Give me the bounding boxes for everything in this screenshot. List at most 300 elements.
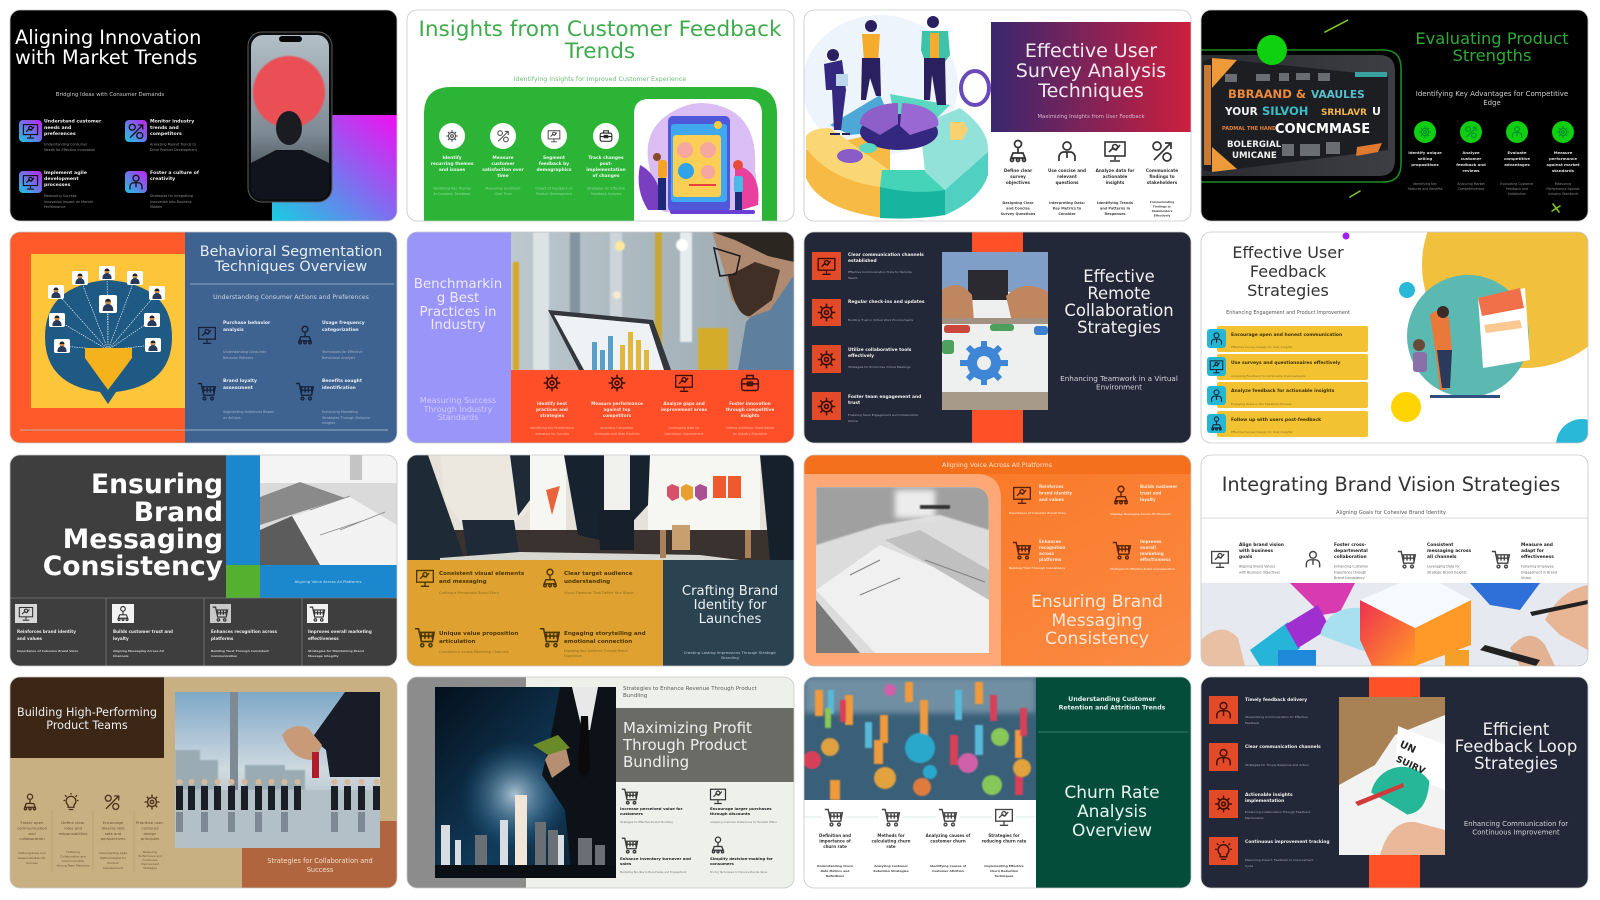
item: selling propositions: Identify unique — [1408, 150, 1442, 155]
item: trust and loyalty: loyalty — [1140, 497, 1156, 502]
photo backing panel — [804, 474, 1001, 666]
green panel — [424, 87, 777, 221]
item: messaging: Strategic Brand Insights — [1427, 570, 1467, 574]
item: questions: Interpreting Data: — [1049, 201, 1086, 205]
item: collaborative tools: Utilize collaborative tools — [848, 347, 912, 353]
green circle — [1257, 35, 1287, 65]
title: Strategies — [1077, 318, 1161, 337]
title: Messaging — [63, 524, 223, 555]
item: culture of creativity: creativity — [150, 176, 175, 182]
top tagline: Bundling — [623, 693, 647, 699]
image: typographic board: UMICANE — [1232, 151, 1277, 161]
item: communicate: Communicating — [1150, 200, 1174, 204]
item: perceived value: Strategies for Effective Product Bundling — [620, 820, 673, 824]
item: advantages: advantages — [1504, 162, 1530, 167]
item: agile processes: Performance — [44, 205, 66, 209]
item: follow up — [1207, 411, 1368, 437]
item: messaging — [1398, 542, 1472, 574]
item: storytelling: Experience — [564, 654, 582, 658]
item: engagement: Foster team engagement and — [848, 394, 921, 400]
item: satisfaction: Measuring Sentiment — [485, 186, 521, 190]
title: Feedback Loop — [1455, 737, 1577, 756]
title: Feedback — [1250, 262, 1327, 281]
item: marketing effectiveness: overall — [1140, 545, 1156, 550]
image: phone with silhouette — [248, 32, 332, 202]
item: culture of creativity: Innovation into Business — [150, 200, 192, 204]
item: customer needs: needs and — [44, 125, 71, 131]
item: methods: Analyzing Customer — [874, 864, 908, 868]
item: decision-making — [710, 837, 773, 874]
item: reinforces identity: and values — [17, 636, 43, 641]
panel: Building High-Performing Product Teams — [10, 677, 397, 888]
item: clear channels — [1209, 743, 1321, 771]
image: audience funnel — [31, 254, 185, 408]
item: collaboration: departmental — [1334, 548, 1368, 554]
item: foster innovation: Foster innovation — [729, 401, 771, 406]
item: recognition: platforms — [211, 636, 234, 641]
item: measure: Measure and — [1521, 542, 1553, 548]
subtitle: Measuring Success — [420, 396, 496, 405]
column dividers — [52, 810, 134, 872]
item: diverse skills: Methodologies for — [100, 856, 127, 860]
image: survey illustration — [1407, 275, 1530, 398]
title: Strategies — [1474, 754, 1558, 773]
item: engagement: Fostering Team Engagement and Collaboration — [848, 413, 919, 417]
item: analyze gaps: Continuous Improvement — [664, 432, 704, 436]
item: target audience: understanding — [564, 579, 610, 585]
item: messaging: all channels — [1427, 554, 1457, 560]
item: communication channels: established — [848, 258, 877, 264]
image: typographic board: PADMAL THE HAND — [1222, 126, 1276, 132]
item: causes — [926, 806, 971, 873]
orange vertical band — [972, 232, 1023, 443]
item: measure — [1492, 542, 1557, 580]
item: best practices: strategies — [540, 413, 564, 418]
orange vertical band — [1369, 677, 1420, 888]
item: selling propositions: Features and Benefits — [1408, 187, 1443, 191]
subtitle: Understanding Consumer Actions and Preferences — [213, 294, 369, 301]
item: larger purchases — [710, 789, 777, 824]
item: advantages — [1500, 121, 1534, 196]
item: post implementation — [586, 123, 626, 196]
item: diverse skills: perspectives — [101, 836, 125, 841]
item: open communication — [17, 794, 48, 865]
item: agile processes: Measuring Success: — [44, 194, 78, 198]
item: objectives: objectives — [1006, 180, 1031, 185]
item: reduction strategies: Churn Reduction — [990, 869, 1018, 873]
item: open communication: Responsibilities for — [18, 856, 46, 860]
subtitle: Bridging Ideas with Consumer Demands — [56, 92, 164, 98]
subtitle: Identifying Insights for Improved Customer Experience — [514, 76, 686, 83]
item: questions: questions — [1055, 180, 1079, 185]
item: objectives: survey — [1010, 174, 1026, 179]
item: trust and loyalty: Builds customer — [1140, 484, 1177, 489]
item: agile processes: Innovation Impact on Market — [44, 200, 93, 204]
item: user-centered design: design — [144, 831, 157, 836]
item: value proposition — [415, 629, 518, 654]
item: user-centered design: Continuous — [142, 858, 158, 862]
title: Messaging — [1051, 611, 1143, 631]
item: communication channels: Effective Communication Tools for Remote — [848, 270, 912, 274]
item: vision alignment: Aligning Brand Values — [1239, 564, 1275, 568]
panel: Ensuring Brand Messaging Consistency (orange) — [804, 455, 1191, 666]
item: engagement: trust — [848, 400, 860, 406]
item: reinforces identity — [15, 604, 78, 653]
title: Effective — [1083, 267, 1155, 286]
subtitle: Environment — [1096, 382, 1142, 392]
title block — [10, 677, 164, 758]
item: continuous tracking: Measuring Impact: Feedback to Improvement — [1245, 858, 1314, 862]
item: culture of creativity: Models — [150, 205, 162, 209]
title: Aligning Innovation — [15, 26, 201, 49]
item: clear channels: Clear communication channels — [1245, 744, 1321, 750]
item: benefits sought: Insights — [322, 421, 335, 425]
item: objectives: Define clear — [1004, 168, 1033, 173]
item: perceived value — [620, 789, 683, 824]
item: recognition: platforms — [1039, 557, 1062, 562]
item: brand loyalty: assessment — [223, 385, 254, 391]
item: user-centered design: Improvement — [141, 862, 159, 866]
item: definition: importance of — [819, 838, 851, 844]
item: methods: rate — [886, 844, 896, 849]
item: definition — [817, 806, 853, 878]
top tagline: Aligning Voice Across All Platforms — [942, 461, 1053, 469]
item: open communication: Defining Roles and — [18, 851, 46, 855]
item: best practices: Identifying Key Performance — [530, 426, 574, 430]
item: post implementation: post- — [600, 161, 613, 167]
image: survey clipboard: UN — [1398, 739, 1417, 756]
item: measure performance: Analyzing Competitor — [600, 426, 634, 430]
item: collaborative tools: effectively — [848, 353, 874, 359]
item: satisfaction: Over Time — [494, 192, 512, 196]
item: performance: Measuring — [1555, 182, 1571, 186]
item: benefits sought: Benefits sought — [322, 378, 363, 384]
item: actionable insights: Engaging Users in the Feedback Process — [1231, 402, 1292, 406]
item: communicate: Communicate — [1146, 168, 1178, 173]
rust callout — [242, 821, 397, 888]
item: performance — [1546, 121, 1580, 196]
item: customer trust: Builds customer trust and — [113, 629, 173, 634]
item: customer trust — [112, 604, 173, 658]
title: Overview — [1072, 821, 1152, 841]
item: best practices: practices and — [536, 407, 568, 412]
title: Industry — [430, 318, 486, 333]
item: value proposition: Unique value proposition — [439, 631, 518, 637]
item: reviews: reviews — [1463, 168, 1480, 173]
item: recognition — [210, 604, 278, 658]
image: typographic board: BOLERGIAL — [1227, 140, 1282, 150]
item: foster innovation — [726, 376, 774, 436]
item: open communication: Effective Survey Design for User Insights — [1231, 345, 1293, 349]
item: demographics: Segment — [543, 155, 565, 161]
subtitle: Enhancing Teamwork in a Virtual — [1060, 374, 1178, 383]
item: analyze: and Patterns in — [1100, 206, 1131, 210]
item: usage frequency: Techniques for Effective — [321, 350, 362, 354]
item: engagement: Online — [848, 419, 858, 423]
item: analyze gaps — [661, 376, 708, 436]
item: reduction strategies: reducing churn rate — [982, 838, 1027, 844]
item: reviews — [1456, 121, 1486, 191]
item: recognition: Building Trust Through Consistency — [1009, 566, 1065, 570]
title block — [616, 708, 794, 782]
item: best practices — [530, 375, 574, 436]
item: methods: Methods for — [877, 833, 905, 838]
item: measure performance: Measure performance — [591, 401, 643, 406]
item: perceived value: customers — [620, 811, 644, 816]
item: marketing effectiveness: Strategies for Maintaining Brand — [308, 649, 364, 653]
item: agile processes — [19, 170, 93, 209]
item: messaging: messaging across — [1427, 548, 1472, 554]
item: collaboration: Enhancing Customer — [1334, 564, 1369, 568]
image: phone illustration — [634, 99, 762, 221]
item: causes: Analyzing causes of — [926, 833, 971, 838]
item: usage frequency — [299, 320, 365, 360]
title: Consistency — [43, 551, 223, 582]
item: recurring themes: Identifying Key Themes — [433, 186, 472, 190]
item: foster innovation: on Industry Standards — [733, 432, 768, 436]
item: advantages: Evaluate — [1507, 150, 1527, 155]
item: collaboration: Brand Consistency — [1334, 576, 1365, 580]
item: actionable insights: implementation — [1245, 798, 1284, 804]
item: analyze gaps: improvement areas — [661, 407, 708, 412]
item: communicate: Findings to — [1153, 204, 1171, 208]
item: timely delivery: Streamlining Communication for Effective — [1245, 715, 1308, 719]
item: objectives: Survey Questions — [1001, 212, 1035, 216]
image: typographic board: BBRAAND & — [1228, 87, 1306, 101]
item: advantages: Feedback and — [1506, 187, 1528, 191]
item: reinforces identity: Importance of Cohesive Brand Voice — [17, 649, 78, 653]
image: grayscale wireframes — [260, 455, 397, 565]
item: diverse skills: Implementing Agile — [99, 851, 127, 855]
title: with Market Trends — [15, 46, 197, 69]
item: diverse skills: Encourage — [103, 820, 124, 825]
item: actionable insights: Enhancing Collaboration Through Feedback — [1245, 810, 1311, 814]
item: continuous tracking: Cycle — [1245, 864, 1253, 868]
title: Churn Rate — [1064, 783, 1160, 803]
item: visual elements: Crafting a Memorable Brand Story — [439, 591, 499, 595]
subtitle: Continuous Improvement — [1472, 828, 1560, 836]
panel: Insights from Customer Feedback Trends — [420, 20, 782, 221]
item: collaboration — [1306, 542, 1369, 580]
item: target audience: Clear target audience — [564, 571, 633, 577]
item: reviews: Analyze — [1462, 150, 1480, 155]
item: inventory: Enhance inventory turnover and — [620, 856, 691, 861]
item: usage frequency: Behavioral Analysis — [322, 356, 355, 360]
item: customer trust: loyalty — [113, 636, 129, 641]
item: methods — [871, 806, 911, 873]
item: objectives: Designing Clear — [1002, 201, 1034, 205]
item: satisfaction: customer — [491, 161, 515, 167]
item: roles: Fostering — [66, 850, 80, 854]
item: reviews: customer — [1461, 156, 1481, 161]
subtitle: Through Industry — [423, 405, 493, 414]
item: recognition: Enhances recognition across — [211, 629, 278, 634]
item: brand identity: brand identity — [1039, 490, 1072, 496]
item: open communication: Success — [26, 861, 38, 865]
top heading: Retention and Attrition Trends — [1059, 704, 1166, 712]
item: marketing effectiveness: Message Integrity — [308, 654, 339, 658]
item: demographics: Impact of Feedback on — [535, 186, 573, 190]
item: marketing effectiveness: Improves overall marketing — [308, 629, 372, 634]
item: agile processes: Implement agile — [44, 170, 87, 176]
item: timely delivery: Feedback — [1245, 721, 1260, 725]
item: communication channels: Clear communication channels — [848, 252, 924, 258]
item: recognition: Enhances — [1039, 539, 1062, 544]
title: Brand — [134, 497, 223, 528]
item: communicate: stakeholders — [1147, 180, 1178, 185]
item: recurring themes: recurring themes — [431, 161, 474, 167]
item: trust and loyalty: trust and — [1140, 490, 1161, 496]
item: open communication — [1207, 326, 1368, 352]
item: reviews: Competitiveness — [1458, 187, 1485, 191]
item: storytelling: Engaging storytelling and — [564, 631, 646, 637]
item: culture of creativity: Foster a culture of — [150, 170, 200, 176]
item: collaboration: Experience through — [1334, 570, 1366, 574]
orange footer band — [511, 370, 794, 443]
item: selling propositions — [1408, 121, 1443, 191]
item: marketing effectiveness — [1110, 539, 1175, 571]
item: communication channels: Teams — [847, 276, 858, 280]
rust callout: Success — [307, 866, 334, 874]
item: recurring themes: and issues — [439, 167, 465, 173]
item: foster innovation: Setting Ambitious Goals Based — [726, 426, 774, 430]
image: typographic board: SRHLAVR — [1321, 108, 1367, 118]
item: measure: Vision — [1521, 576, 1531, 580]
item: actionable insights — [1207, 382, 1368, 408]
item: agile processes: processes — [44, 182, 71, 188]
item: storytelling: emotional connection — [564, 639, 632, 645]
item: roles: Communication — [62, 859, 85, 863]
item: purchase behavior: analysis — [223, 327, 244, 333]
item: value proposition: articulation — [439, 639, 476, 645]
image: brand cards and hands — [1201, 583, 1588, 666]
image: typographic board: VAAULES — [1311, 89, 1365, 101]
item: timely delivery: Timely feedback delivery — [1245, 697, 1307, 703]
item: clear channels: Strategies for Timely Response and Action — [1245, 763, 1309, 767]
item: storytelling — [540, 629, 646, 658]
item: brand loyalty: on Actions — [223, 416, 241, 420]
item: target audience: Visual Elements That Define Your Brand — [564, 591, 634, 595]
item: visual elements — [417, 570, 525, 595]
item: definition: Definition and — [819, 833, 851, 838]
item: surveys: Analyzing Feedback for Actionable Improvements — [1231, 374, 1306, 378]
item: brand identity: Reinforces — [1039, 484, 1064, 489]
item: post implementation: of changes — [592, 173, 620, 179]
title: Consistency — [1045, 629, 1149, 649]
item: measure: effectiveness — [1521, 554, 1554, 560]
item: brand loyalty — [198, 378, 274, 420]
item: check-ins: Regular check-ins and updates — [848, 299, 925, 305]
item: decision-making: Simplify decision-making for — [710, 856, 773, 861]
item: communication channels — [812, 252, 924, 280]
item: continuous tracking — [1209, 837, 1330, 868]
subtitle: Aligning Goals for Cohesive Brand Identity — [1336, 510, 1446, 516]
item: recognition — [1009, 539, 1065, 570]
title: Behavioral Segmentation — [200, 244, 382, 260]
item: reduction strategies — [982, 806, 1027, 878]
title block: Building High-Performing — [17, 706, 157, 719]
item: industry trends — [125, 118, 198, 152]
connector line — [804, 816, 1036, 818]
item: roles: Define clear — [61, 820, 85, 825]
item: satisfaction: Measure — [492, 155, 514, 161]
item: demographics: demographics — [537, 167, 572, 173]
image: typographic board: CONCMMASE — [1275, 122, 1370, 137]
item: recognition: Building Trust Through Consistent — [211, 649, 269, 653]
item: analyze: Responses — [1104, 212, 1126, 216]
strip dividers — [10, 598, 397, 666]
item: questions: Use concise and — [1048, 168, 1086, 173]
image: team at whiteboards — [407, 455, 794, 560]
item: selling propositions: selling — [1418, 156, 1432, 161]
item: customer needs — [19, 118, 102, 152]
item: value proposition: Consistency Across Marketing Channels — [439, 650, 509, 654]
title: Insights from Customer Feedback — [419, 17, 782, 42]
item: post implementation: Strategies for Effective — [587, 186, 625, 190]
colour blocks — [226, 455, 397, 598]
item: demographics — [535, 123, 573, 196]
item: analyze — [1096, 142, 1135, 216]
item: analyze gaps: Analyze gaps and — [663, 401, 705, 406]
item: customer needs: Understand customer — [44, 118, 102, 124]
title: g Best — [437, 291, 479, 306]
item: customer needs: Needs for Effective Innovation — [44, 148, 95, 152]
subtitle: Standards — [438, 413, 478, 422]
image: survey clipboard — [1339, 697, 1445, 855]
item: advantages: Satisfaction — [1508, 192, 1526, 196]
top tagline: Strategies to Enhance Revenue Through Product — [623, 686, 758, 692]
title: Integrating Brand Vision Strategies — [1222, 473, 1560, 496]
item: collaboration: Foster cross- — [1334, 542, 1366, 548]
item: diverse skills: diverse skill — [101, 826, 125, 830]
item: questions: relevant — [1057, 174, 1077, 179]
item: surveys: Use surveys and questionnaires effectively — [1231, 360, 1340, 366]
item: open communication: Encourage open and honest communication — [1231, 332, 1342, 338]
item: reinforces identity: Reinforces brand identity — [17, 629, 76, 634]
subtitle: Enhancing Communication for — [1464, 820, 1568, 828]
item: definition: Understanding Churn — [817, 864, 853, 868]
subtitle: Creating Lasting Impressions Through Strategic — [684, 650, 776, 655]
item: industry trends: trends and — [150, 125, 179, 131]
panel: Effective Remote Collaboration Strategies — [804, 232, 1191, 443]
item: diverse skills: Development — [103, 866, 124, 870]
title block: Survey Analysis — [1016, 60, 1166, 82]
item: engagement — [812, 392, 921, 423]
item: user-centered design: Strategies — [143, 866, 157, 870]
item: benefits sought: identification — [322, 385, 356, 391]
image: survey clipboard: SUIRV — [1394, 755, 1426, 777]
item: customer trust: Channels — [113, 654, 129, 658]
item: purchase behavior: Behavior Patterns — [223, 356, 253, 360]
item: roles — [56, 793, 90, 868]
item: recurring themes: Identify — [442, 155, 462, 161]
item: marketing effectiveness: effectiveness — [308, 636, 339, 641]
title: Analysis — [1077, 802, 1147, 822]
item: causes: customer churn — [930, 838, 966, 844]
item: satisfaction: satisfaction over — [482, 167, 525, 173]
item: satisfaction — [482, 123, 525, 196]
item: measure performance: competitors — [603, 413, 632, 418]
item: larger purchases: through discounts — [710, 811, 751, 816]
item: trust and loyalty — [1110, 484, 1177, 516]
item: inventory — [620, 838, 691, 874]
item: vision alignment: with Business Objectives — [1239, 570, 1280, 574]
title block: Through Product — [622, 736, 747, 754]
item: communicate: findings to — [1149, 174, 1175, 179]
item: advantages: competitive — [1504, 156, 1530, 161]
item: recognition: across — [1039, 551, 1054, 556]
item: actionable insights: Mechanisms — [1245, 816, 1264, 820]
